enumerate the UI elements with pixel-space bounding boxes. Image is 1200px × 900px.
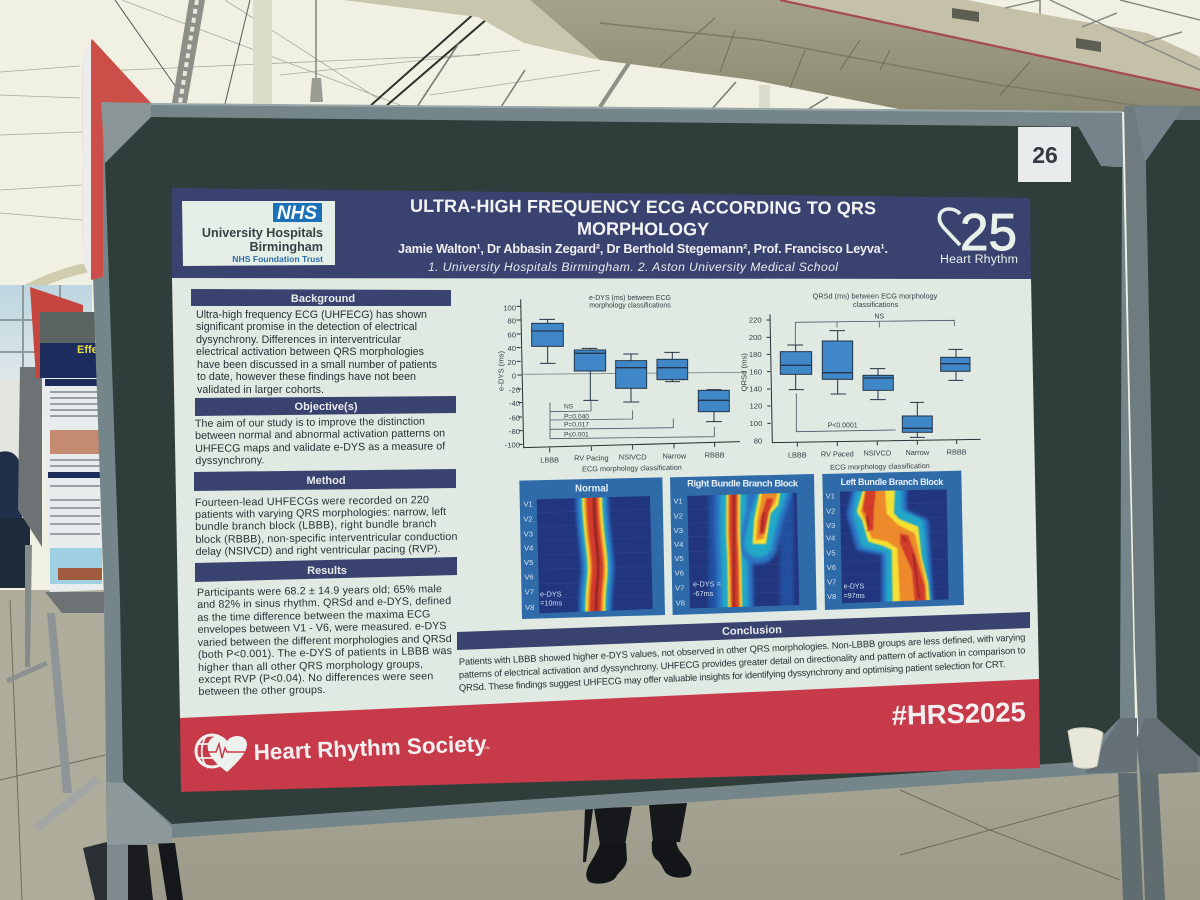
significance brackets: P≤0.001: [564, 431, 589, 438]
text: results: varied between the different morphologies and QRSd: [198, 633, 452, 649]
ventilation ducts: [344, 0, 1200, 112]
heat map: Right Bundle Branch Block: -67ms: [693, 589, 714, 598]
text: method: block (RBBB), non-specific interventricular conduction: [195, 531, 458, 546]
neighbouring poster board, left: [7, 287, 104, 828]
heat map: Normal: V6: [524, 573, 534, 582]
heat map: Right Bundle Branch Block: e-DYS =: [693, 580, 721, 589]
heading: objectives: [195, 396, 456, 416]
heat map: Left Bundle Branch Block: V5: [826, 549, 836, 558]
text: results: higher than all other QRS morphology groups,: [198, 658, 423, 674]
x labels: ECG morphology classification: [830, 461, 930, 472]
heat map: Normal: Normal: [575, 483, 608, 494]
chart: QRSd box plot: 160: [749, 367, 762, 376]
text: objectives: UHFECG maps and validate e-DYS as a measure of: [195, 440, 445, 455]
heat map: Right Bundle Branch Block: [670, 474, 817, 615]
chart: QRSd box plot: 200: [749, 333, 762, 342]
text: background: electrical activation between QRS morphologies: [196, 346, 424, 358]
panel: objectives: [195, 396, 456, 467]
text: conclusion: Patients with LBBB showed higher e-DYS values, not observed in other QRS morphologies. Non-LBBB groups are less defined, with varying: [459, 631, 1026, 667]
heat map: Right Bundle Branch Block: V4: [674, 540, 684, 549]
heading: conclusion: Conclusion: [722, 624, 782, 638]
neighbouring poster board, right: [1118, 106, 1200, 900]
text: background: validated in larger cohorts.: [197, 384, 324, 396]
heat map: Left Bundle Branch Block: V1: [826, 492, 835, 501]
box: RBBB: [698, 390, 729, 422]
heading: method: [194, 469, 456, 491]
heat map: Right Bundle Branch Block: V7: [675, 583, 684, 592]
text: method: delay (NSIVCD) and right ventricular pacing (RVP).: [196, 543, 441, 558]
logo: University Hospitals Birmingham NHS: [182, 201, 335, 266]
heading: results: [195, 557, 457, 582]
logo: Heart Rhythm 25: Heart Rhythm: [940, 252, 1018, 266]
text: objectives: between normal and abnormal activation patterns on: [195, 427, 445, 442]
heat map: Normal: [519, 477, 665, 619]
chart: QRSd box plot: 140: [749, 385, 762, 394]
box: LBBB: [780, 345, 812, 390]
heat map: Normal: V4: [524, 543, 534, 552]
text: results: envelopes between V1 - V6, were measured. e-DYS: [197, 620, 447, 636]
title: [410, 196, 876, 239]
heat map: Left Bundle Branch Block: V2: [826, 507, 835, 516]
text: method: patients with varying QRS morphologies: narrow, left: [195, 506, 446, 521]
heat map: Left Bundle Branch Block: [822, 471, 964, 610]
chart: QRSd box plot: [740, 291, 981, 472]
significance brackets: NS: [874, 313, 885, 320]
box: Narrow: [657, 352, 688, 382]
heat map: Right Bundle Branch Block: V3: [674, 526, 683, 535]
chart: QRSd box plot: QRSd (ms): [740, 353, 749, 391]
x labels: LBBB: [540, 456, 559, 465]
text: background: [196, 309, 437, 396]
title: MORPHOLOGY: [577, 219, 709, 239]
text: background: Ultra-high frequency ECG (UHFECG) has shown: [196, 309, 427, 321]
header band: [172, 188, 1031, 279]
footer band: [180, 679, 1040, 792]
x labels: Narrow: [663, 451, 687, 460]
bag and stand legs under the board: [83, 842, 183, 900]
text: results: between the other groups.: [198, 684, 326, 698]
heading: objectives: Objective(s): [295, 401, 358, 413]
logo: Heart Rhythm Society: Heart Rhythm Society: [253, 731, 488, 765]
x labels: RBBB: [947, 447, 967, 456]
heat map: Normal: e-DYS: [540, 589, 562, 598]
logo: Heart Rhythm Society: [196, 731, 490, 772]
heat map: Left Bundle Branch Block: V4: [826, 534, 836, 543]
panel: background: [191, 289, 451, 396]
heading: background: Background: [291, 293, 355, 305]
text: results: [197, 583, 453, 698]
logo: Heart Rhythm 25: [939, 204, 1018, 266]
chart: QRSd box plot: QRSd (ms) between ECG morphology: [813, 291, 938, 300]
main poster board: [82, 39, 1137, 846]
significance brackets: NS: [564, 404, 574, 411]
heat map: Left Bundle Branch Block: V6: [827, 563, 836, 572]
heat map: Normal: =10ms: [540, 599, 563, 608]
logo: University Hospitals Birmingham NHS: Birmingham: [250, 240, 323, 254]
number card: 26: 26: [1032, 142, 1058, 168]
x labels: NSIVCD: [619, 453, 647, 462]
text: background: dysynchrony. Differences in interventricular: [196, 334, 401, 346]
significance brackets: P=0.017: [564, 422, 589, 429]
chart: QRSd box plot: 120: [750, 402, 762, 411]
logo: University Hospitals Birmingham NHS: NHS Foundation Trust: [232, 254, 323, 264]
authors: Jamie Walton¹, Dr Abbasin Zegard², Dr Berthold Stegemann², Prof. Francisco Leyva¹.: [398, 242, 888, 256]
text: results: and 82% in sinus rhythm. QRSd and e-DYS, defined: [197, 595, 451, 611]
text: conclusion: QRSd. These findings suggest UHFECG may offer valuable insights for identifying dyssynchrony and optimising patient selection for CRT.: [459, 658, 1006, 693]
presenter behind the board: [583, 803, 691, 884]
heading: method: Method: [306, 475, 346, 487]
x labels: RBBB: [705, 451, 725, 460]
chart: e-DYS box plot: -60: [509, 413, 520, 422]
chart: QRSd box plot: 80: [754, 436, 762, 445]
panel: results: [195, 557, 457, 698]
heat map: Right Bundle Branch Block: V6: [675, 569, 684, 578]
box: Narrow: [902, 402, 932, 437]
heat map: Normal: V8: [525, 603, 534, 612]
chart: QRSd box plot: classifications: [853, 300, 899, 309]
heading: results: Results: [307, 565, 347, 577]
chart: e-DYS box plot: morphology classifications: [589, 303, 671, 310]
logo: Heart Rhythm 25: 25: [960, 204, 1017, 262]
heat map: Right Bundle Branch Block: V2: [674, 512, 683, 521]
text: results: (both P<0.001). The e-DYS of patients in LBBB was: [198, 645, 452, 661]
chart: e-DYS box plot: -100: [505, 441, 520, 450]
heat map: Right Bundle Branch Block: V1: [673, 496, 683, 505]
text: method: Fourteen-lead UHFECGs were recorded on 220: [195, 494, 429, 509]
ceiling lattice mast: [172, 0, 205, 103]
significance brackets: P<0.0001: [828, 422, 858, 429]
text: results: as the time difference between the maxima ECG: [197, 608, 430, 624]
chart: e-DYS box plot: 60: [507, 330, 516, 339]
box: RV Pacing: [574, 348, 606, 400]
chart: e-DYS box plot: 0: [512, 371, 516, 380]
box: NSIVCD: [616, 354, 647, 402]
neighbouring poster board, left: Effec: [77, 344, 104, 356]
title: ULTRA-HIGH FREQUENCY ECG ACCORDING TO QRS: [410, 196, 876, 218]
box: NSIVCD: [863, 369, 893, 400]
text: objectives: [195, 415, 445, 467]
panel: method: [194, 469, 458, 558]
text: background: to date, however these findings have not been: [197, 371, 416, 383]
text: conclusion: [459, 631, 1026, 693]
chart: e-DYS box plot: e-DYS (ms): [496, 351, 505, 391]
x labels: RV Pacing: [574, 453, 609, 462]
x labels: RV Paced: [821, 450, 854, 459]
significance brackets: [795, 313, 954, 432]
text: results: except RVP (P<0.04). No differences were seen: [198, 670, 433, 686]
chart: e-DYS box plot: -40: [509, 399, 520, 408]
logo: Heart Rhythm Society: SM: [484, 745, 490, 750]
hashtag: #HRS2025: [891, 696, 1026, 731]
text: background: significant promise in the detection of electrical: [196, 321, 417, 333]
significance brackets: [550, 400, 714, 439]
chart: e-DYS box plot: 20: [507, 358, 516, 367]
text: objectives: dyssynchrony.: [195, 454, 264, 467]
text: method: bundle branch block (LBBB), right bundle branch: [195, 518, 436, 533]
chart: QRSd box plot: 220: [749, 316, 762, 325]
x labels: [540, 451, 725, 474]
x labels: NSIVCD: [863, 448, 891, 457]
heat map: Left Bundle Branch Block: =97ms: [844, 593, 865, 600]
heat map: Left Bundle Branch Block: e-DYS: [844, 584, 865, 591]
heat map: Normal: V5: [524, 558, 533, 567]
heading: conclusion: [457, 612, 1030, 650]
coffee cup on board ledge: [1068, 728, 1103, 768]
poster sheet: [172, 188, 1040, 792]
x labels: ECG morphology classification: [582, 463, 682, 474]
heat map: Normal: V2: [523, 515, 533, 524]
logo: University Hospitals Birmingham NHS: University Hospitals: [202, 226, 323, 240]
box: RBBB: [941, 349, 970, 380]
chart: e-DYS box plot: [496, 295, 747, 474]
heat map: Left Bundle Branch Block: V7: [827, 578, 836, 587]
chart: e-DYS box plot: 40: [507, 344, 516, 353]
chart: e-DYS box plot: 80: [507, 317, 516, 326]
text: background: have been discussed in a small number of patients: [197, 359, 437, 371]
chart: e-DYS box plot: 100: [503, 303, 516, 312]
chart: QRSd box plot: 180: [749, 350, 762, 359]
heat map: Left Bundle Branch Block: Left Bundle Branch Block: [841, 477, 943, 487]
heat maps: [519, 471, 964, 619]
heat map: Normal: V7: [525, 588, 534, 597]
heading: background: [191, 289, 451, 306]
chart: QRSd box plot: 100: [750, 419, 762, 428]
text: objectives: The aim of our study is to improve the distinction: [195, 416, 425, 430]
heat map: Normal: V3: [524, 529, 533, 538]
hanging lights: [310, 0, 1048, 112]
box: RV Paced: [822, 331, 853, 394]
heat map: Right Bundle Branch Block: V8: [676, 598, 685, 607]
text: method: [195, 494, 458, 558]
text: conclusion: patterns of electrical activation and dyssynchrony. UHFECG provides greater detail on directionality and pattern of activation in comparison to: [459, 644, 1026, 680]
heat map: Right Bundle Branch Block: V5: [674, 554, 684, 563]
text: results: Participants were 68.2 ± 14.9 years old; 65% male: [197, 583, 442, 599]
chart: e-DYS box plot: e-DYS (ms) between ECG: [589, 295, 671, 302]
number card: 26: [1018, 127, 1071, 182]
ceiling support pole: [253, 0, 272, 106]
x labels: LBBB: [788, 451, 807, 460]
box: LBBB: [532, 319, 563, 363]
heat map: Right Bundle Branch Block: Right Bundle Branch Block: [687, 479, 799, 489]
x labels: Narrow: [906, 448, 930, 457]
chart: e-DYS box plot: -20: [509, 386, 520, 395]
panel: conclusion: [457, 612, 1030, 693]
logo: University Hospitals Birmingham NHS: NHS: [277, 203, 317, 224]
heat map: Left Bundle Branch Block: V8: [827, 592, 836, 601]
significance brackets: P=0.040: [564, 413, 589, 420]
affiliations: 1. University Hospitals Birmingham. 2. Aston University Medical School: [428, 260, 838, 274]
chart: e-DYS box plot: -80: [509, 427, 520, 436]
heat map: Normal: V1: [523, 500, 533, 509]
x labels: [788, 447, 967, 472]
heat map: Left Bundle Branch Block: V3: [826, 521, 835, 530]
